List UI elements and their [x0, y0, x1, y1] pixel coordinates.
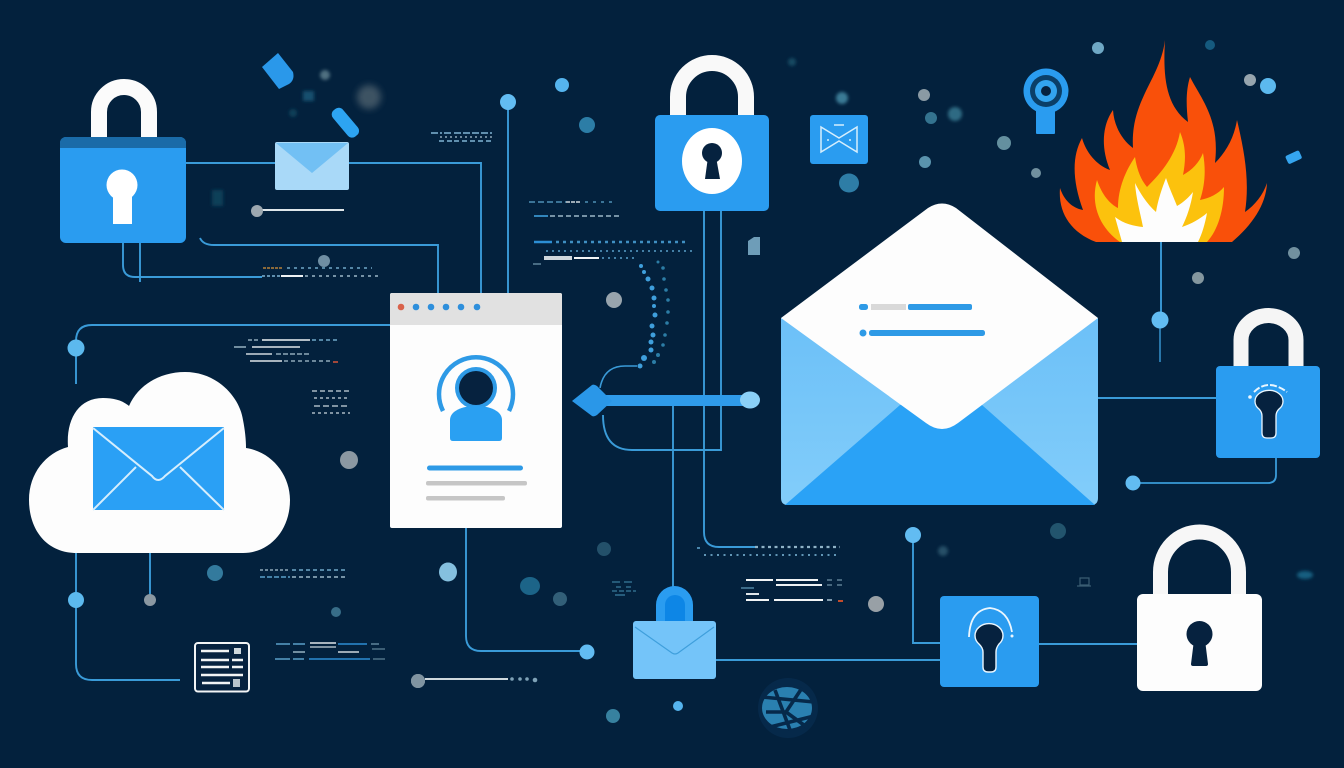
node: right lock: [1126, 476, 1140, 490]
icon: flame: [1060, 40, 1267, 242]
node: window bottom: [580, 644, 594, 660]
avatar: [439, 357, 513, 441]
background particles: [207, 40, 1313, 723]
icon: small blue mail tile: [810, 115, 868, 164]
window controls: [398, 304, 480, 310]
dotted arc: [638, 260, 670, 368]
lock tile: keyhole: [940, 596, 1039, 687]
pseudo text: top left block: [431, 133, 494, 141]
cloud with envelope: [29, 372, 290, 553]
icon: globe: [758, 678, 818, 738]
pseudo text: left small column: [312, 391, 350, 413]
lock: large white: [1137, 532, 1262, 691]
lock: top centre: [655, 63, 769, 211]
icon: small envelope top: [275, 142, 349, 190]
pseudo text: below cloud: [260, 570, 347, 577]
envelope text lines: [859, 304, 985, 336]
pseudo text: under arrow dotted: [697, 547, 840, 555]
text lines: [426, 466, 527, 500]
pseudo text: centre second: [533, 242, 692, 264]
node: top centre: [500, 94, 516, 110]
slider: top left: [251, 205, 263, 217]
pseudo text: bottom centre: [741, 580, 843, 601]
node: flame line: [1152, 312, 1168, 328]
browser window: [390, 293, 562, 528]
node: gray below cloud: [144, 594, 156, 606]
node: cloud top: [68, 340, 84, 356]
icon: target marker: [1024, 68, 1068, 134]
connector lines: [76, 102, 1276, 680]
pseudo text: centre top: [529, 202, 622, 216]
pseudo text: faint left of small lock: [612, 582, 636, 595]
icon: document list: [195, 643, 249, 692]
pseudo text: lock status: [262, 268, 380, 276]
cloud envelope: [93, 427, 224, 510]
lock envelope small: [633, 586, 716, 679]
large envelope: [781, 204, 1098, 505]
pseudo text: left middle: [234, 340, 338, 362]
node: blue tile: [905, 527, 921, 543]
slider: bottom: [411, 674, 537, 688]
pseudo text: bottom left: [275, 643, 385, 659]
lock: right: [1216, 316, 1320, 458]
node: cloud bottom: [68, 592, 84, 608]
arrow: [572, 385, 760, 416]
lock: top left: [60, 87, 186, 243]
